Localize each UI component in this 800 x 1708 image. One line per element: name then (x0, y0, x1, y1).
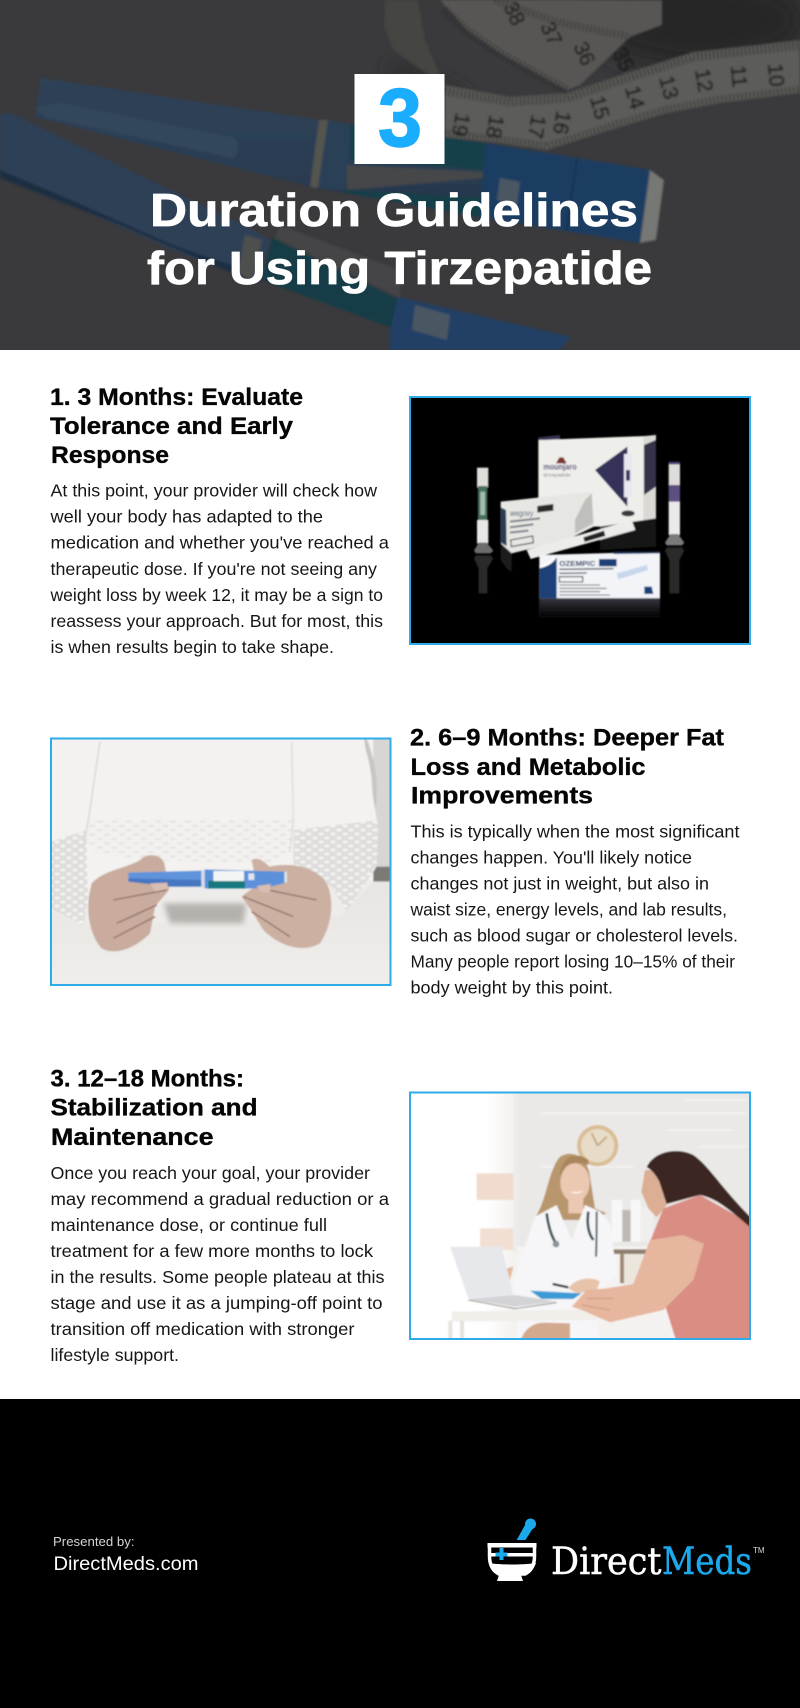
header photo: injection pens and measuring tape: 17 (523, 113, 550, 140)
patient face and hair (641, 1170, 667, 1217)
body text 1: is when results begin to take shape. (50, 637, 334, 657)
body text 2: This is typically when the most significant (410, 822, 740, 842)
heading 2 (410, 725, 724, 810)
photo: medication boxes on black (410, 397, 750, 644)
clock (577, 1125, 618, 1166)
body text 2: changes not just in weight, but also in (410, 874, 709, 894)
body text 3: stage and use it as a jumping-off point to (50, 1293, 382, 1313)
header photo: injection pens and measuring tape: 36 (568, 38, 599, 69)
laptop (450, 1246, 512, 1299)
title: Duration Guidelines (150, 184, 638, 236)
body text 1: weight loss by week 12, it may be a sign to (49, 585, 383, 605)
section 2: 6-9 months (47, 725, 740, 998)
right hand (242, 859, 331, 948)
heading 3 (50, 1066, 258, 1151)
body text 1 (49, 481, 389, 657)
heading 1: Tolerance and Early (50, 413, 294, 440)
heading 3: 3. 12–18 Months: (50, 1066, 244, 1093)
body text 3: in the results. Some people plateau at this (50, 1267, 385, 1287)
body text 1: medication and whether you've reached a (50, 533, 389, 553)
body text 2 (410, 822, 740, 998)
body text 2: such as blood sugar or cholesterol levels. (410, 926, 738, 946)
body text 2: changes happen. You'll likely notice (410, 848, 692, 868)
doctor (536, 1154, 607, 1220)
body text 3: transition off medication with stronger (50, 1319, 355, 1339)
title (147, 184, 652, 294)
photo: doctor consulting patient (407, 1089, 753, 1343)
body text 1: well your body has adapted to the (49, 507, 323, 527)
logo wordmark: TM (753, 1546, 765, 1555)
photo: medication boxes on black: OZEMPIC (559, 559, 596, 568)
body text 3: lifestyle support. (50, 1345, 179, 1365)
heading 1: Response (51, 442, 169, 469)
section 3: 12-18 months (50, 1066, 753, 1365)
heading 3: Stabilization and (50, 1095, 258, 1122)
tape loop (385, 1, 439, 74)
DirectMeds logo (488, 1518, 765, 1583)
table (374, 880, 390, 882)
left hand (88, 855, 169, 951)
presented by credit (53, 1534, 198, 1575)
header photo: injection pens and measuring tape: 15 (585, 93, 613, 122)
shelf and binders (612, 1200, 622, 1242)
body text 2: waist size, energy levels, and lab results, (410, 900, 727, 920)
header photo: injection pens and measuring tape: 19 (447, 111, 474, 138)
Wegovy box (501, 492, 594, 553)
sweater (90, 740, 377, 888)
patient arm (572, 1235, 704, 1322)
number badge (354, 71, 444, 164)
header photo: injection pens and measuring tape: 16 (548, 109, 575, 136)
Mounjaro box (538, 435, 656, 527)
photo: hands holding injection pen (47, 735, 393, 989)
header photo: injection pens and measuring tape: 37 (535, 18, 566, 49)
logo wordmark (551, 1540, 765, 1583)
icon: mortar and pestle (488, 1518, 536, 1581)
presented by credit: DirectMeds.com (54, 1554, 198, 1575)
Wegovy pen (527, 520, 635, 559)
body text 3: may recommend a gradual reduction or a (50, 1189, 389, 1209)
body text 1: reassess your approach. But for most, this (50, 611, 383, 631)
number badge: 3 (378, 71, 422, 164)
lower pen (0, 114, 270, 283)
body text 3: Once you reach your goal, your provider (50, 1163, 370, 1183)
Ozempic box (539, 552, 660, 598)
header banner (0, 0, 800, 350)
header photo: injection pens and measuring tape: 12 (690, 67, 717, 94)
presented by credit: Presented by: (53, 1534, 134, 1549)
footer (0, 1399, 800, 1708)
logo wordmark: Direct (551, 1540, 662, 1583)
body text 2: body weight by this point. (410, 978, 613, 998)
heading 2: Loss and Metabolic (410, 754, 646, 781)
header photo: injection pens and measuring tape: 13 (654, 73, 682, 102)
header photo: injection pens and measuring tape: 18 (481, 113, 508, 140)
body text 1: therapeutic dose. If you're not seeing any (50, 559, 377, 579)
header photo: injection pens and measuring tape: 14 (620, 83, 649, 112)
body text 3 (50, 1163, 389, 1365)
left pen (477, 468, 488, 488)
photo: medication boxes on black: mounjaro (543, 461, 577, 471)
header photo: injection pens and measuring tape (0, 0, 800, 350)
body text 1: At this point, your provider will check how (50, 481, 377, 501)
title: for Using Tirzepatide (147, 242, 652, 294)
photo: medication boxes on black: wegovy (509, 509, 533, 518)
heading 1: 1. 3 Months: Evaluate (50, 384, 303, 411)
body text 2: Many people report losing 10–15% of their (410, 952, 735, 972)
pen (128, 870, 202, 882)
header photo: injection pens and measuring tape: 35 (607, 44, 638, 75)
heading 3: Maintenance (51, 1124, 214, 1151)
table (452, 1309, 597, 1322)
right pen (669, 463, 680, 487)
upper pen (35, 78, 650, 243)
heading 2: Improvements (411, 783, 593, 810)
section 1: 3 months (49, 384, 750, 657)
header photo: injection pens and measuring tape: 10 (763, 62, 788, 88)
body text 3: treatment for a few more months to lock (50, 1241, 373, 1261)
photo: medication boxes on black: tirzepatide (543, 473, 571, 478)
patient shirt (651, 1195, 753, 1342)
logo wordmark: Meds (662, 1540, 752, 1583)
tablet (530, 1291, 582, 1299)
body text 3: maintenance dose, or continue full (50, 1215, 327, 1235)
heading 1 (50, 384, 303, 469)
header photo: injection pens and measuring tape: 11 (726, 64, 751, 88)
heading 2: 2. 6–9 Months: Deeper Fat (410, 725, 724, 752)
